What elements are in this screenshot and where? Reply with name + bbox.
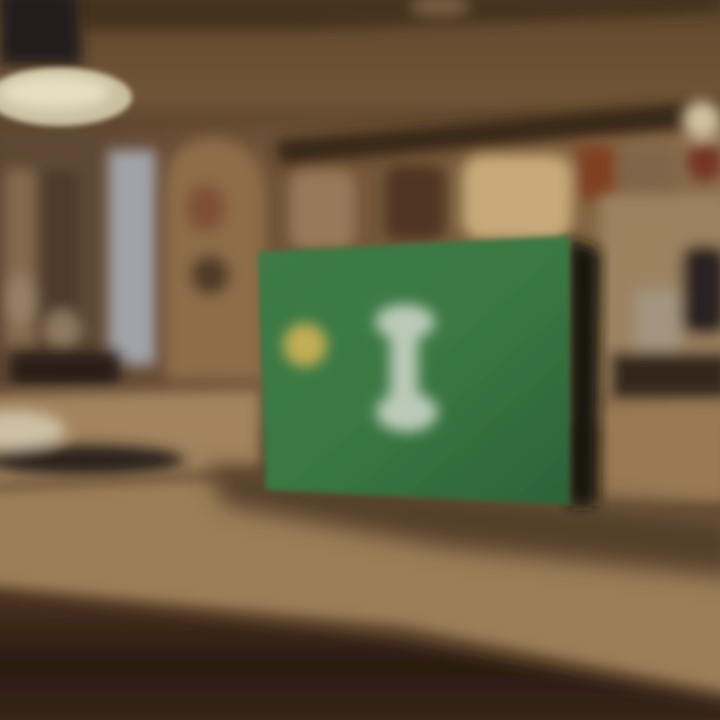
- background: rear wall: [0, 125, 720, 425]
- counter: back ledge: [0, 352, 720, 505]
- background: bright window: [108, 150, 156, 365]
- background: left wall panels: [0, 130, 105, 380]
- counter: white and dark objects on the left: [0, 411, 185, 475]
- counter: dark front edge: [0, 592, 720, 720]
- box side in shadow: [568, 238, 600, 506]
- background: dark ceiling beam: [80, 0, 720, 165]
- box front face: [258, 236, 570, 505]
- background: arched wall niche: [165, 138, 265, 380]
- background: small right lamp: [682, 100, 720, 182]
- green box: [258, 236, 600, 506]
- background: right wall and appliance: [600, 195, 720, 397]
- background: shelf items: [290, 145, 675, 250]
- counter: wooden top: [0, 478, 720, 695]
- white bone-shaped icon: [375, 304, 438, 432]
- counter: shadow under the box: [205, 465, 720, 578]
- lamp: hanging pendant: [0, 0, 132, 126]
- background: ceiling: [0, 0, 720, 150]
- yellow dot icon: [283, 323, 327, 367]
